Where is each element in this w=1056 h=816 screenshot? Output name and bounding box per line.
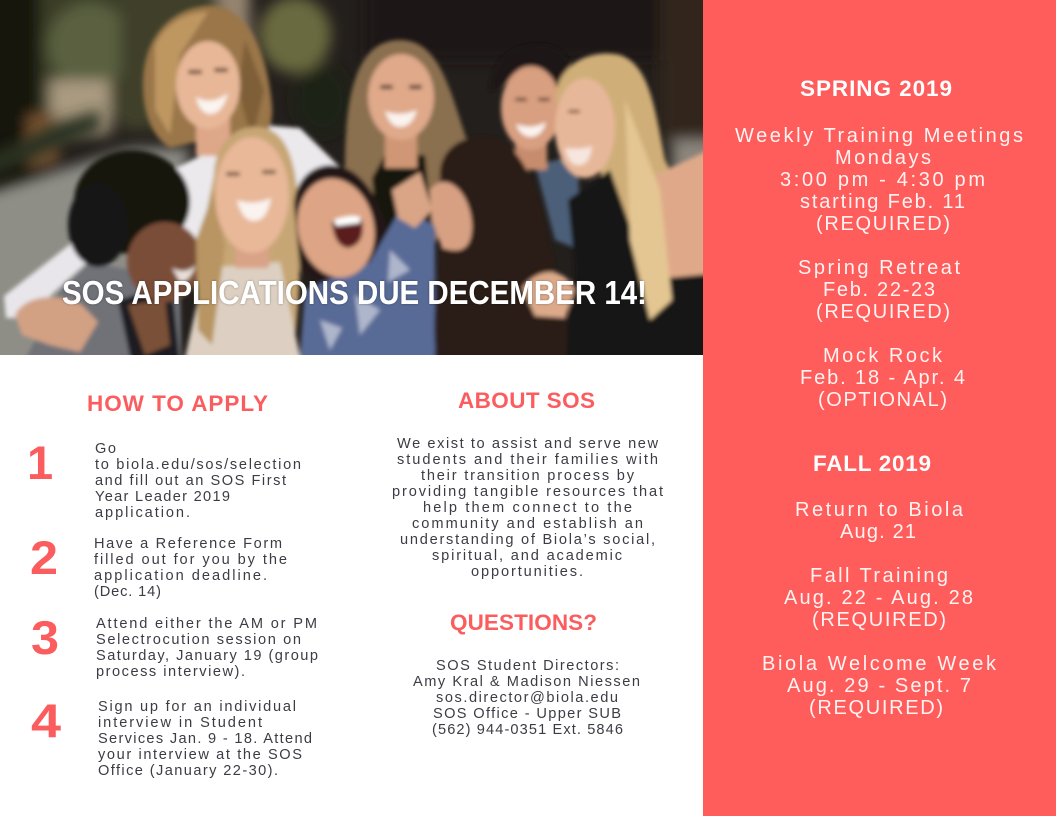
- dark-haired man: [491, 62, 572, 92]
- fall 2019 schedule: Aug. 22 - Aug. 28: [784, 587, 973, 609]
- spring 2019 schedule: SPRING 2019: [800, 76, 952, 101]
- fall 2019 schedule: [762, 451, 997, 719]
- step 3: Attend either the AM or PM: [96, 616, 317, 632]
- fall 2019 schedule: (REQUIRED): [809, 697, 943, 719]
- spring 2019 schedule: (REQUIRED): [816, 213, 950, 235]
- spring 2019 schedule: (OPTIONAL): [818, 389, 947, 411]
- spring 2019 schedule: Spring Retreat: [798, 257, 960, 279]
- heading: how to apply: HOW TO APPLY: [87, 391, 268, 416]
- step 1: 1: [27, 436, 53, 489]
- step 1: Year Leader 2019: [95, 489, 230, 505]
- panel: questions: [413, 610, 640, 738]
- about text: We exist to assist and serve new: [397, 436, 658, 452]
- fall 2019 schedule: Fall Training: [810, 565, 948, 587]
- panel: schedule: [703, 0, 1056, 816]
- step 1: application.: [95, 505, 190, 521]
- step 2: filled out for you by the: [94, 552, 287, 568]
- contact details: Amy Kral & Madison Niessen: [413, 674, 640, 690]
- step 3: Selectrocution session on: [96, 632, 301, 648]
- about text: help them connect to the: [423, 500, 632, 516]
- about text: community and establish an: [412, 516, 643, 532]
- step 4: Sign up for an individual: [98, 699, 296, 715]
- fall 2019 schedule: (REQUIRED): [812, 609, 946, 631]
- step 1: and fill out an SOS First: [95, 473, 286, 489]
- fall 2019 schedule: Biola Welcome Week: [762, 653, 997, 675]
- spring 2019 schedule: Mock Rock: [823, 345, 943, 367]
- step 4: your interview at the SOS: [98, 747, 302, 763]
- contact details: [413, 658, 640, 738]
- contact details: (562) 944-0351 Ext. 5846: [432, 722, 623, 738]
- photo: group of laughing students: [0, 0, 703, 355]
- step 3: [31, 611, 318, 680]
- hand on arm: [15, 297, 98, 352]
- step 1: Go: [95, 441, 116, 457]
- step 4: interview in Student: [98, 715, 262, 731]
- about text: students and their families with: [397, 452, 658, 468]
- step 2: Have a Reference Form: [94, 536, 282, 552]
- spring 2019 schedule: (REQUIRED): [816, 301, 950, 323]
- fall 2019 schedule: Aug. 29 - Sept. 7: [787, 675, 971, 697]
- fall 2019 schedule: Return to Biola: [795, 499, 964, 521]
- contact details: sos.director@biola.edu: [436, 690, 618, 706]
- spring 2019 schedule: Weekly Training Meetings: [735, 125, 1023, 147]
- blonde woman at right: [554, 50, 672, 224]
- about text: their transition process by: [421, 468, 635, 484]
- about text: opportunities.: [471, 564, 583, 580]
- step 4: [31, 694, 312, 779]
- fall 2019 schedule: Aug. 21: [840, 521, 916, 543]
- contact details: SOS Office - Upper SUB: [433, 706, 621, 722]
- hand on shoulder: [522, 272, 575, 318]
- step 4: Office (January 22-30).: [98, 763, 278, 779]
- step 2: [30, 531, 287, 600]
- about text: [392, 436, 663, 580]
- panel: about sos: [392, 388, 663, 580]
- heading: questions: QUESTIONS?: [450, 610, 597, 635]
- fall 2019 schedule: FALL 2019: [813, 451, 931, 476]
- heading: about sos: ABOUT SOS: [458, 388, 595, 413]
- step 2: (Dec. 14): [94, 584, 161, 600]
- spring 2019 schedule: 3:00 pm - 4:30 pm: [780, 169, 985, 191]
- brunette woman in profile: [434, 137, 568, 380]
- step 4: Services Jan. 9 - 18. Attend: [98, 731, 312, 747]
- spring 2019 schedule: Mondays: [835, 147, 931, 169]
- step 1: [27, 436, 301, 521]
- spring 2019 schedule: Feb. 22-23: [823, 279, 935, 301]
- about text: providing tangible resources that: [392, 484, 663, 500]
- steps: [0, 148, 190, 380]
- blonde woman in lace: [206, 124, 304, 334]
- banner headline: SOS APPLICATIONS DUE DECEMBER 14!: [62, 274, 647, 311]
- woman at back centre: [342, 37, 470, 243]
- hand raised: [392, 172, 432, 228]
- step 1: to biola.edu/sos/selection: [95, 457, 301, 473]
- spring 2019 schedule: Feb. 18 - Apr. 4: [800, 367, 965, 389]
- step 2: 2: [30, 531, 58, 584]
- step 3: Saturday, January 19 (group: [96, 648, 318, 664]
- about text: spiritual, and academic: [432, 548, 622, 564]
- woman with braided hair: [26, 262, 184, 355]
- man with long hair: [172, 122, 342, 242]
- about text: understanding of Biola’s social,: [400, 532, 655, 548]
- step 3: process interview).: [96, 664, 245, 680]
- step 3: 3: [31, 611, 59, 664]
- spring 2019 schedule: [735, 76, 1023, 411]
- laughing woman: [292, 162, 389, 286]
- contact details: SOS Student Directors:: [436, 658, 619, 674]
- step 2: application deadline.: [94, 568, 267, 584]
- step 4: 4: [31, 694, 61, 747]
- panel: how to apply: [27, 391, 318, 779]
- spring 2019 schedule: starting Feb. 11: [800, 191, 965, 213]
